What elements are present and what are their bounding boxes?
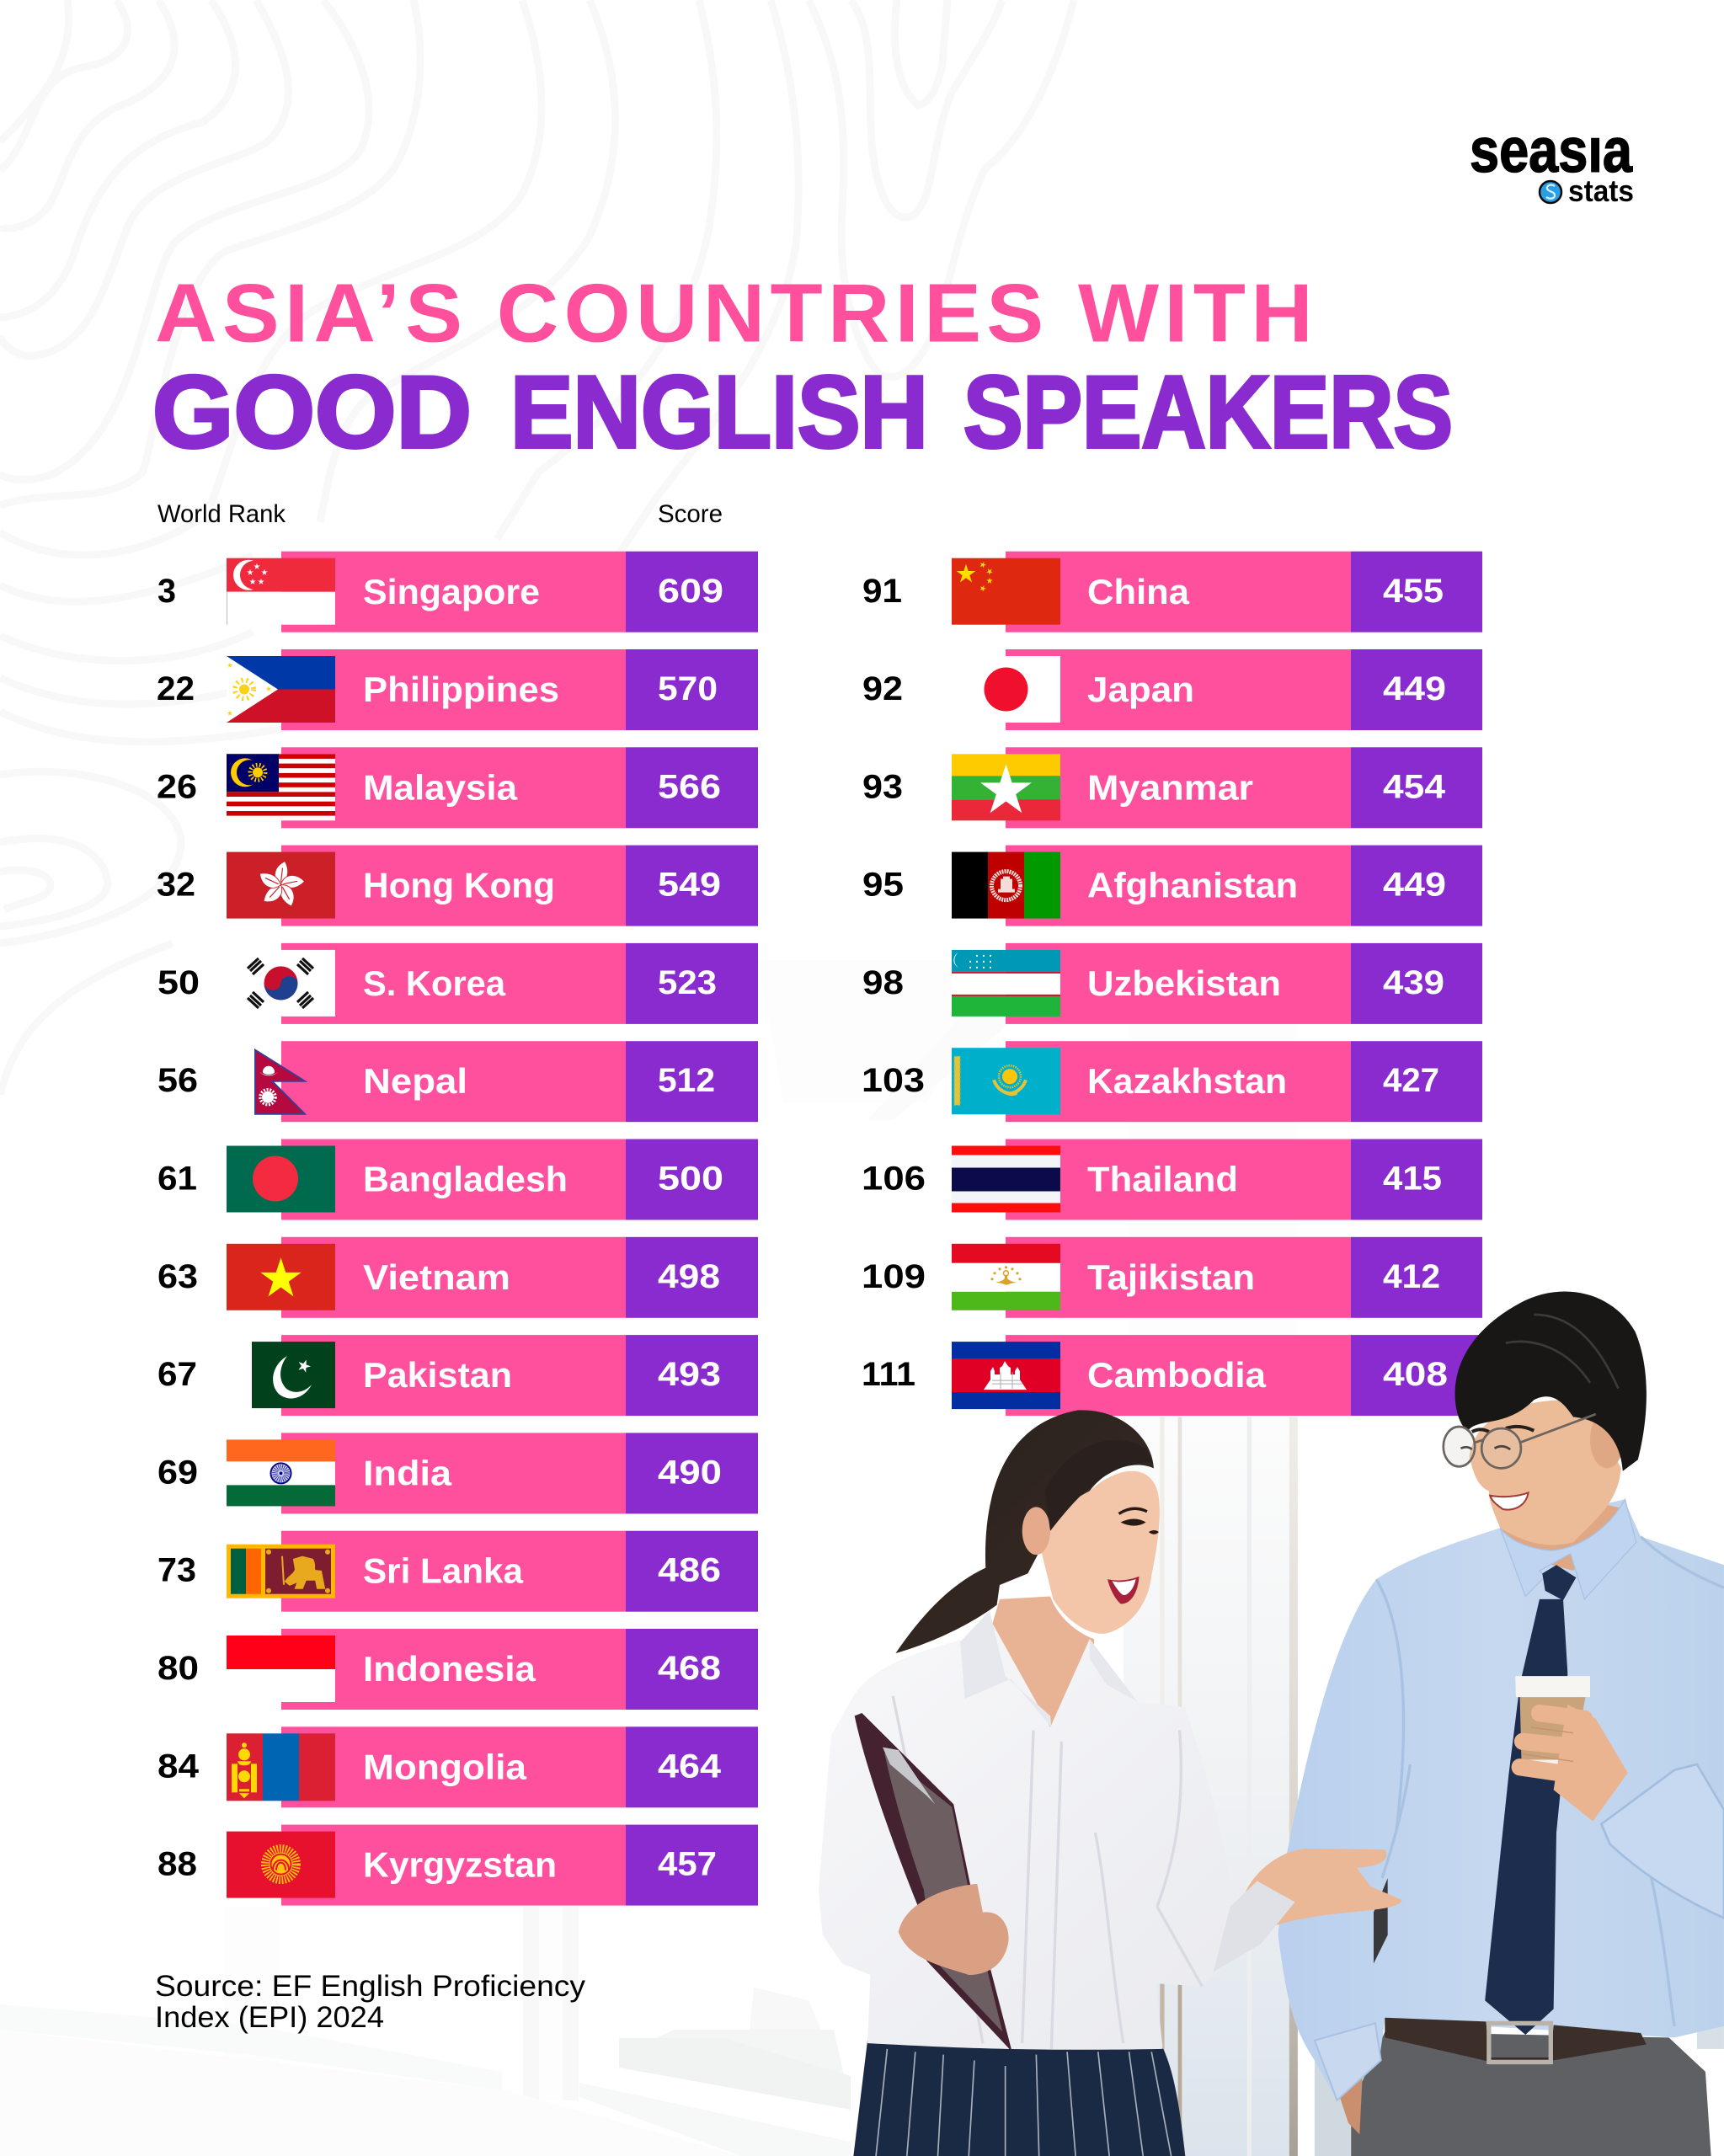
man collar — [1500, 1500, 1636, 1599]
flag: Nepal — [255, 1050, 305, 1114]
man eyebrows and eyes — [1460, 1427, 1534, 1449]
row: Bangladesh: 61 — [157, 1161, 197, 1198]
man coffee cup — [1515, 1676, 1590, 1774]
column heading: score: Score — [658, 500, 723, 528]
row: Tajikistan — [862, 1237, 1482, 1318]
row: Vietnam: 498 — [658, 1258, 720, 1295]
row: Tajikistan: 109 — [862, 1258, 926, 1295]
row: Sri Lanka: 486 — [658, 1552, 721, 1589]
woman clipboard — [855, 1713, 1012, 2052]
row: Singapore: 3 — [157, 573, 176, 610]
row: India: 490 — [658, 1454, 722, 1491]
row: Nepal — [157, 1041, 758, 1122]
logo icon — [1540, 181, 1561, 203]
title line 2: ENGLISH — [510, 355, 928, 469]
row: Hong Kong: Hong Kong — [363, 866, 555, 905]
row: Myanmar — [862, 747, 1482, 828]
flag: Indonesia — [227, 1636, 335, 1702]
title — [152, 266, 1453, 469]
woman shirt collar — [960, 1610, 1138, 1727]
row: Pakistan: 493 — [658, 1356, 721, 1393]
background: faint city and ship through the window — [619, 1988, 851, 2110]
woman face — [1042, 1471, 1160, 1634]
woman gesturing hand — [1244, 1849, 1401, 1930]
flag: Singapore — [227, 558, 335, 625]
logo sub-label: stats — [1568, 173, 1634, 208]
column heading: world rank: World Rank — [157, 500, 286, 528]
row: China: 455 — [1383, 573, 1444, 610]
row: Japan: 92 — [862, 670, 903, 707]
row: Singapore: Singapore — [363, 572, 540, 611]
woman white shirt — [819, 1616, 1294, 2050]
row: Kyrgyzstan — [157, 1825, 758, 1906]
title line 2 — [152, 355, 1453, 469]
row: Bangladesh — [157, 1139, 758, 1219]
background: contour line pattern — [0, 0, 1074, 1095]
row: Japan: 449 — [1383, 670, 1446, 707]
man blue shirt — [1278, 1500, 1724, 2100]
row: Vietnam — [157, 1237, 758, 1318]
row: Malaysia: 26 — [157, 768, 197, 805]
background: left window frame — [0, 1907, 851, 2156]
row: China — [862, 552, 1482, 632]
row: Philippines: 570 — [658, 670, 718, 707]
row: Philippines: Philippines — [363, 670, 559, 709]
row: Tajikistan: Tajikistan — [1087, 1257, 1255, 1297]
title line 1: ASIA’S COUNTRIES WITH — [155, 266, 1318, 359]
row: Myanmar: Myanmar — [1087, 767, 1253, 807]
man shirt cuff at pocket — [1315, 2023, 1381, 2100]
woman hand on clipboard — [899, 1884, 1009, 1975]
row: Vietnam: 63 — [157, 1258, 198, 1295]
row: Cambodia: 408 — [1383, 1356, 1448, 1393]
source note: Index (EPI) 2024 — [155, 2001, 384, 2034]
man hair highlights — [1506, 1315, 1618, 1389]
man smile — [1490, 1492, 1529, 1510]
flag: Tajikistan — [952, 1244, 1060, 1310]
flag: Sri Lanka — [227, 1545, 335, 1598]
man arm shadow gap — [1374, 1878, 1388, 1963]
row: Thailand: 106 — [862, 1161, 926, 1198]
row: S. Korea — [157, 943, 758, 1024]
flag: Thailand — [952, 1145, 1060, 1213]
woman hair over forehead — [1044, 1440, 1153, 1531]
logo wordmark: seasia — [1470, 115, 1633, 185]
row: Cambodia — [862, 1335, 1482, 1416]
photo: two smiling business people — [819, 1292, 1724, 2156]
row: Myanmar: 454 — [1383, 768, 1446, 805]
flag: Philippines — [227, 656, 335, 723]
row: Hong Kong: 32 — [157, 867, 195, 904]
flag: Vietnam — [227, 1244, 335, 1310]
row: Vietnam: Vietnam — [363, 1257, 510, 1297]
flag: Cambodia — [952, 1342, 1060, 1409]
row: Singapore — [157, 552, 758, 632]
row: Indonesia — [157, 1629, 758, 1710]
row: Indonesia: 468 — [658, 1650, 721, 1687]
row: Sri Lanka — [157, 1531, 758, 1612]
row: Nepal: Nepal — [363, 1061, 467, 1101]
man hand holding cup — [1520, 1705, 1628, 1821]
row: Mongolia: Mongolia — [363, 1747, 527, 1786]
row: Singapore: 609 — [658, 573, 723, 610]
flag: Mongolia — [227, 1733, 335, 1801]
row: India — [157, 1433, 758, 1513]
row: Malaysia: 566 — [658, 768, 721, 805]
flag: Malaysia — [227, 754, 335, 820]
flag: S. Korea — [227, 950, 335, 1017]
woman shirt cuff — [1214, 1881, 1294, 1972]
row: Japan: Japan — [1087, 670, 1194, 709]
row: Thailand: Thailand — [1087, 1159, 1238, 1199]
row: Bangladesh: Bangladesh — [363, 1159, 568, 1199]
flag: Afghanistan — [952, 852, 1060, 919]
title line 2: SPEAKERS — [963, 355, 1453, 469]
flag: Japan — [952, 656, 1060, 723]
row: Indonesia: 80 — [157, 1650, 199, 1687]
man belt and buckle — [1385, 2018, 1647, 2062]
row: Afghanistan: 449 — [1383, 867, 1446, 904]
man head — [1469, 1400, 1621, 1545]
row: Kazakhstan: 103 — [862, 1062, 925, 1099]
row: Tajikistan: 412 — [1383, 1258, 1440, 1295]
row: Kyrgyzstan: 88 — [157, 1846, 197, 1883]
row: Hong Kong — [157, 846, 758, 926]
man ear — [1590, 1412, 1624, 1468]
row: Malaysia — [157, 747, 758, 828]
flag: Myanmar — [952, 754, 1060, 820]
row: Uzbekistan: 439 — [1383, 964, 1444, 1001]
person: man — [1278, 1292, 1724, 2156]
row: Bangladesh: 500 — [658, 1161, 723, 1198]
flag: Uzbekistan — [952, 950, 1060, 1017]
row: Afghanistan: 95 — [862, 867, 904, 904]
woman shirt folds — [893, 1696, 1202, 2049]
row: Thailand — [862, 1139, 1482, 1219]
man pocket wrist — [1337, 2078, 1363, 2134]
man forearm sleeve cuff — [1601, 1764, 1724, 1918]
row: Philippines — [157, 649, 758, 730]
man grey trousers — [1351, 2032, 1711, 2156]
row: Hong Kong: 549 — [658, 867, 721, 904]
row: Myanmar: 93 — [862, 768, 903, 805]
row: Pakistan — [157, 1335, 758, 1416]
row: China: China — [1087, 572, 1190, 611]
row: S. Korea: 50 — [157, 964, 200, 1001]
row: Cambodia: 111 — [862, 1356, 915, 1393]
row: Mongolia: 84 — [157, 1748, 200, 1785]
person: woman — [819, 1410, 1401, 2156]
row: Philippines: 22 — [157, 670, 195, 707]
row: Nepal: 56 — [157, 1062, 198, 1099]
woman ear — [1022, 1507, 1050, 1555]
row: Kazakhstan — [862, 1041, 1482, 1122]
source note: Source: EF English Proficiency — [155, 1970, 586, 2003]
row: Uzbekistan: Uzbekistan — [1087, 963, 1281, 1003]
flag: Kyrgyzstan — [227, 1832, 335, 1898]
flag: Hong Kong — [227, 852, 335, 919]
background: office window scene — [0, 960, 1724, 2156]
man black hair — [1455, 1292, 1647, 1471]
row: Kazakhstan: 427 — [1383, 1062, 1439, 1099]
row: Afghanistan — [862, 846, 1482, 926]
row: Kazakhstan: Kazakhstan — [1087, 1061, 1287, 1101]
woman pinstripe trousers — [853, 2041, 1185, 2156]
flag: India — [227, 1439, 335, 1506]
man navy tie — [1485, 1565, 1576, 2035]
row: Pakistan: 67 — [157, 1356, 197, 1393]
row: Cambodia: Cambodia — [1087, 1355, 1267, 1395]
flag: Bangladesh — [227, 1145, 335, 1213]
row: Japan — [862, 649, 1482, 730]
row: Kyrgyzstan: 457 — [658, 1846, 717, 1883]
woman neck and chest — [990, 1596, 1094, 1727]
row: Uzbekistan — [862, 943, 1482, 1024]
row: India: 69 — [157, 1454, 198, 1491]
row: Sri Lanka: 73 — [157, 1552, 196, 1589]
row: Thailand: 415 — [1383, 1161, 1442, 1198]
man shirt folds — [1376, 1536, 1724, 2026]
row: Mongolia — [157, 1726, 758, 1807]
row: India: India — [363, 1453, 452, 1492]
row: Malaysia: Malaysia — [363, 767, 518, 807]
logo: seasia stats — [1470, 137, 1633, 204]
row: Indonesia: Indonesia — [363, 1649, 536, 1689]
row: Uzbekistan: 98 — [862, 964, 904, 1001]
woman ponytail and hair — [895, 1410, 1154, 1653]
row: S. Korea: 523 — [658, 964, 717, 1001]
row: Sri Lanka: Sri Lanka — [363, 1551, 524, 1591]
background: vertical blinds between the people — [1124, 1417, 1724, 2156]
row: China: 91 — [862, 573, 902, 610]
title line 2: GOOD — [152, 355, 472, 469]
flag: Kazakhstan — [952, 1048, 1060, 1114]
flag: Pakistan — [252, 1342, 335, 1408]
woman eyes and smile — [1108, 1508, 1159, 1604]
row: S. Korea: S. Korea — [363, 963, 506, 1003]
man glasses — [1444, 1414, 1596, 1468]
row: Pakistan: Pakistan — [363, 1355, 512, 1395]
row: Afghanistan: Afghanistan — [1087, 866, 1298, 905]
source note — [155, 1970, 586, 2034]
row: Nepal: 512 — [658, 1062, 715, 1099]
flag: China — [952, 558, 1060, 625]
man neck — [1500, 1502, 1621, 1571]
row: Mongolia: 464 — [658, 1748, 722, 1785]
row: Kyrgyzstan: Kyrgyzstan — [363, 1845, 557, 1885]
